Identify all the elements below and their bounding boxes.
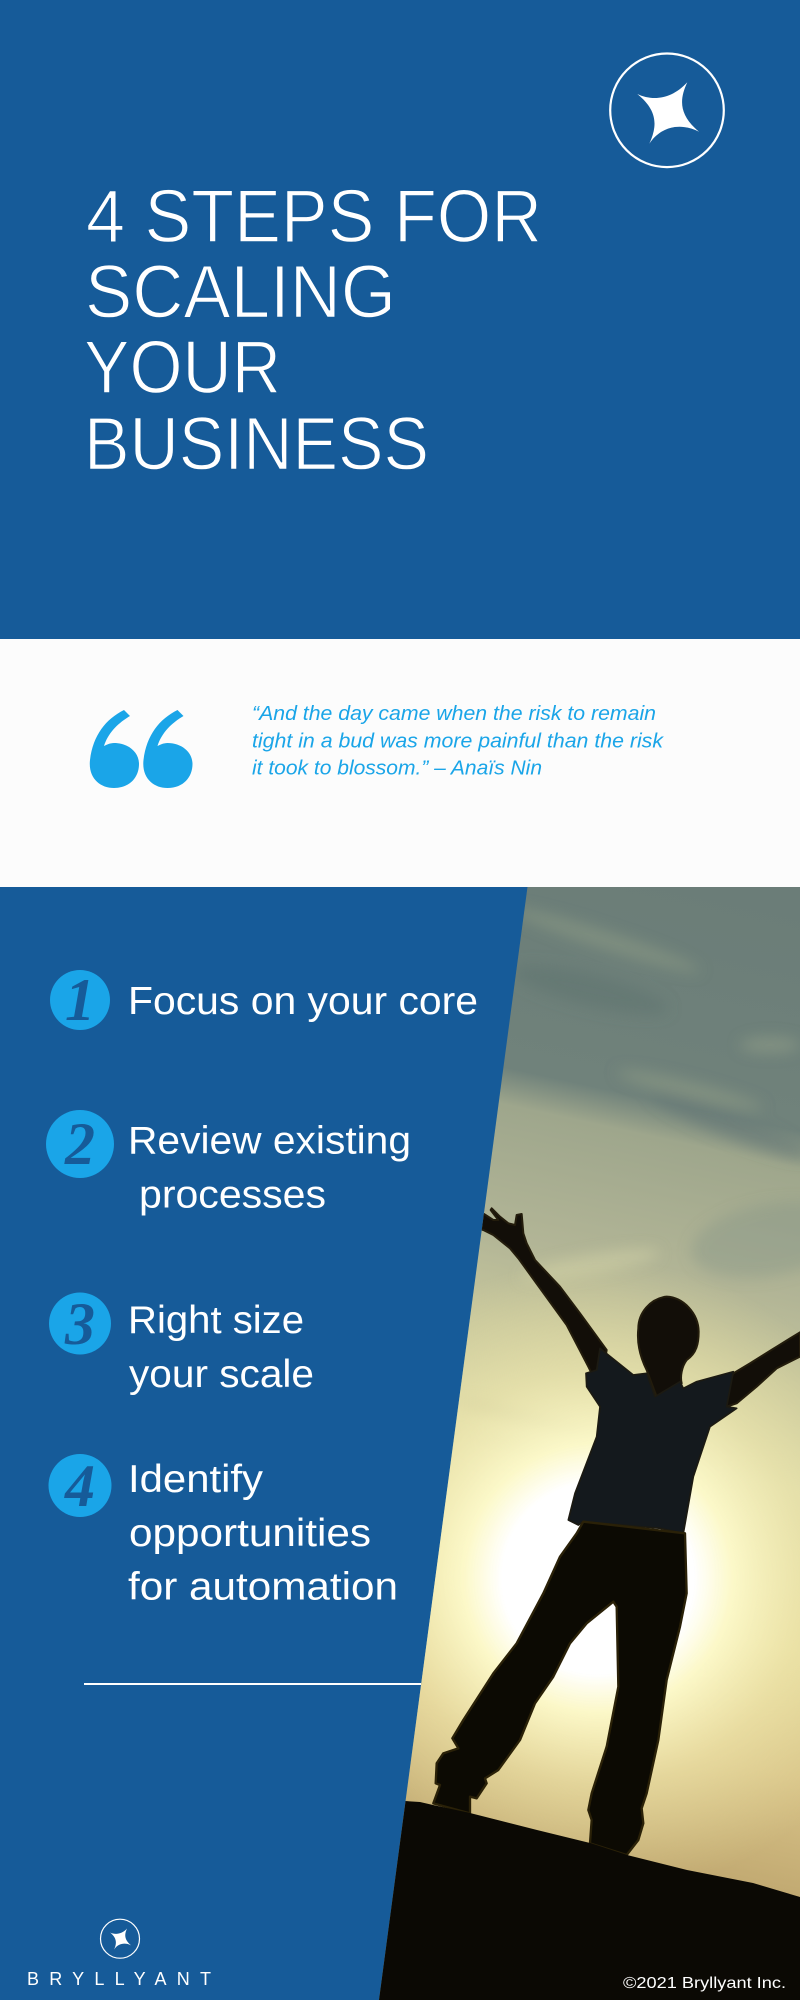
silhouette: arms, hand and head [473,1208,800,1407]
step 3 [49,1291,314,1396]
step 1 [50,967,478,1033]
divider line [84,1683,421,1685]
panel: quote band [0,639,800,887]
quote text [252,703,664,780]
step 1: Focus on your core [128,980,478,1023]
copyright: ©2021 Bryllyant Inc. [623,1975,786,1992]
step 2: processes [139,1174,326,1216]
step 4: for automation [128,1566,398,1608]
title [84,174,542,486]
photo: silhouette of person with raised arms at sunset [370,887,800,2000]
step 2: Review existing [128,1120,411,1162]
brand logo: BRYLLYANT [27,1969,211,1989]
ground [370,1795,800,2000]
step 2: 2 [64,1111,95,1177]
step 4: Identify [128,1458,264,1501]
step 4: 4 [64,1453,95,1519]
icon: top sparkle logo [610,54,724,167]
quote text: it took to blossom.” – Anaïs Nin [252,758,542,780]
step 3: your scale [129,1353,314,1396]
step 4 [48,1453,398,1608]
step 4: opportunities [129,1512,371,1555]
brand logo [27,1919,211,1989]
silhouette: trousers and feet [433,1522,687,1855]
title: YOUR [84,325,281,409]
clouds [523,911,800,1279]
title: SCALING [85,250,396,334]
title: 4 STEPS FOR [86,174,542,258]
step 3: 3 [64,1291,95,1357]
silhouette: t-shirt [568,1348,737,1533]
quote text: “And the day came when the risk to remain [252,703,656,725]
icon: quotation marks [90,710,192,788]
panel: steps background [0,887,800,2000]
step 3: Right size [128,1299,304,1342]
step 2 [46,1110,411,1216]
quote text: tight in a bud was more painful than the risk [252,730,664,752]
step 1: 1 [65,967,95,1033]
panel: header background [0,0,800,639]
title: BUSINESS [84,402,429,486]
